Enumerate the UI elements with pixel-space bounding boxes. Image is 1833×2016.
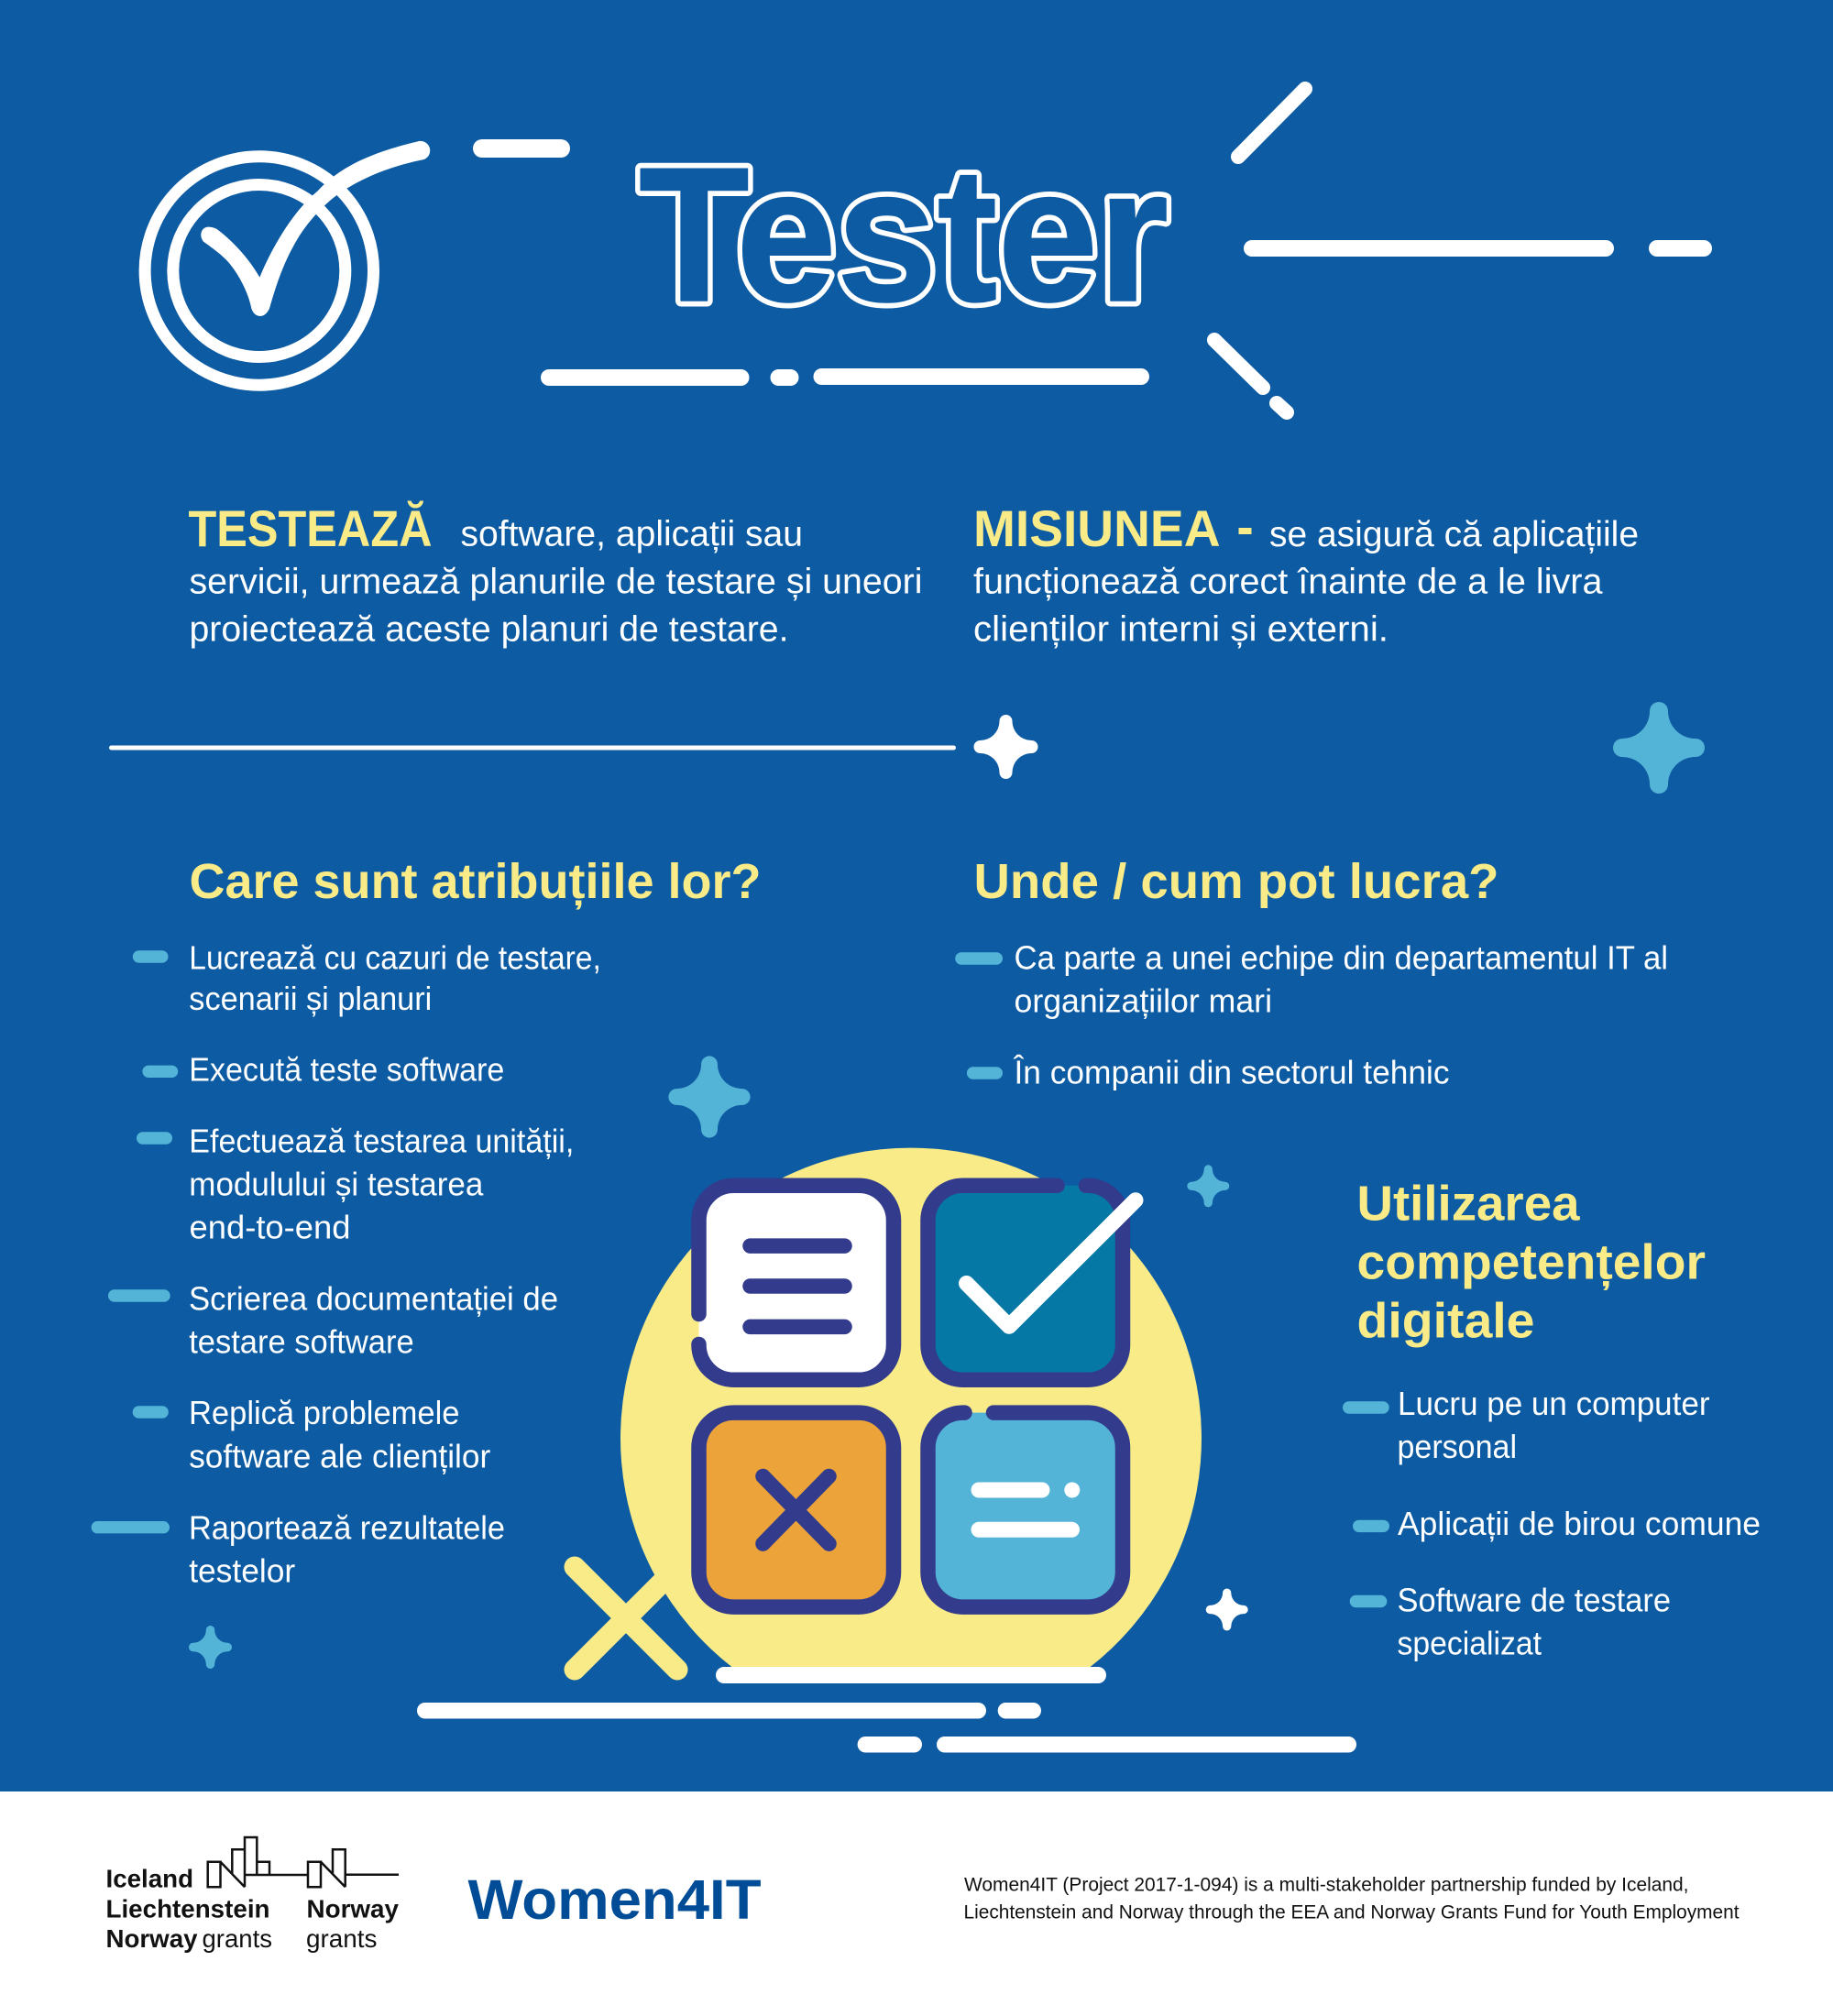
yellow circle [620, 1148, 1202, 1668]
text block: testează: software, aplicații sau [460, 515, 803, 553]
logo: EEA and Norway grants: Liechtenstein [106, 1894, 269, 1923]
logo: EEA and Norway grants [106, 1837, 399, 1953]
list: responsibilities: testare software [189, 1323, 414, 1361]
panel: where to work [955, 854, 1668, 1091]
logo: EEA and Norway grants: Norway [306, 1894, 399, 1923]
title: Tester [639, 128, 1169, 342]
tile: check [927, 1186, 1136, 1380]
icon: circled check mark [145, 141, 430, 385]
illustration: test tiles [575, 1148, 1202, 1670]
list: digital skills: specializat [1397, 1624, 1542, 1662]
panel: responsibilities [92, 854, 762, 1590]
divider line [109, 746, 956, 750]
list: where to work: În companii din sectorul tehnic [1014, 1054, 1450, 1091]
list: responsibilities: Execută teste software [189, 1050, 504, 1088]
icon: blue sparkle above circle [668, 1056, 751, 1138]
icon: yellow cross [575, 1567, 677, 1670]
list: digital skills [1343, 1385, 1761, 1662]
text block: misiunea: clienților interni și externi. [973, 610, 1388, 649]
icon: large blue sparkle [1613, 702, 1705, 794]
list: responsibilities: Efectuează testarea unității, [189, 1122, 574, 1159]
panel: digital skills: competențelor [1356, 1235, 1706, 1291]
funding note [964, 1874, 1740, 1923]
tile: document [698, 1186, 894, 1380]
tile: cross [698, 1413, 894, 1607]
icon: small blue sparkle bottom left [189, 1626, 232, 1669]
text block: misiunea [973, 499, 1639, 649]
heading: responsibilities: Care sunt atribuțiile lor? [189, 854, 761, 910]
text block: testează: proiectează aceste planuri de testare. [189, 610, 788, 649]
footer panel [0, 1791, 1833, 2016]
logo: EEA and Norway grants: grants [202, 1924, 272, 1953]
list: responsibilities [92, 938, 601, 1590]
text block: misiunea: MISIUNEA [973, 499, 1221, 557]
title: Tester [639, 128, 1169, 342]
panel: digital skills [1343, 1176, 1761, 1662]
funding note: Women4IT (Project 2017-1-094) is a multi-stakeholder partnership funded by Iceland, [964, 1874, 1688, 1895]
list: digital skills: personal [1397, 1428, 1517, 1465]
tile: notes [927, 1413, 1123, 1607]
heading: where to work: Unde / cum pot lucra? [973, 854, 1499, 909]
list: digital skills: Aplicații de birou comune [1398, 1505, 1761, 1542]
decorative floor bars [417, 1667, 1356, 1752]
list: responsibilities: scenarii și planuri [189, 980, 432, 1017]
heading: digital skills: Utilizarea [1356, 1176, 1580, 1231]
logo: EEA and Norway grants: Iceland [106, 1864, 193, 1892]
list: responsibilities: Replică problemele [189, 1394, 460, 1431]
list: responsibilities: software ale clienților [189, 1438, 490, 1475]
list: where to work: organizațiilor mari [1014, 982, 1272, 1020]
logo: EEA and Norway grants: grants [306, 1924, 378, 1953]
text block: testează: TESTEAZĂ [189, 499, 433, 557]
list: where to work: Ca parte a unei echipe din departamentul IT al [1014, 938, 1668, 976]
logo: EEA and Norway grants: Norway [106, 1924, 198, 1953]
list: digital skills: Software de testare [1397, 1582, 1671, 1618]
list: responsibilities: testelor [189, 1552, 295, 1590]
text block: misiunea: funcționează corect înainte de a le livra [973, 563, 1603, 601]
icon: white sparkle on divider [973, 715, 1037, 779]
list: responsibilities: Scrierea documentației de [189, 1279, 558, 1317]
text block: testează: servicii, urmează planurile de testare și uneori [189, 563, 922, 601]
text block: testează [189, 499, 922, 649]
list: where to work [955, 938, 1668, 1091]
list: digital skills: Lucru pe un computer [1398, 1385, 1710, 1422]
icon: small blue sparkle right of tiles [1187, 1165, 1229, 1207]
funding note: Liechtenstein and Norway through the EEA and Norway Grants Fund for Youth Employment [964, 1901, 1740, 1923]
text block: misiunea: se asigură că aplicațiile [1269, 515, 1639, 554]
list: responsibilities: Raportează rezultatele [189, 1508, 505, 1546]
logo: Women4IT: Women4IT [467, 1868, 761, 1931]
list: responsibilities: modulului și testarea [189, 1165, 484, 1202]
list: responsibilities: Lucrează cu cazuri de testare, [189, 938, 601, 976]
panel: digital skills: digitale [1356, 1293, 1534, 1348]
icon: small white sparkle right of tiles [1206, 1589, 1248, 1631]
list: responsibilities: end-to-end [189, 1209, 350, 1246]
decorative title rays [473, 89, 1712, 412]
